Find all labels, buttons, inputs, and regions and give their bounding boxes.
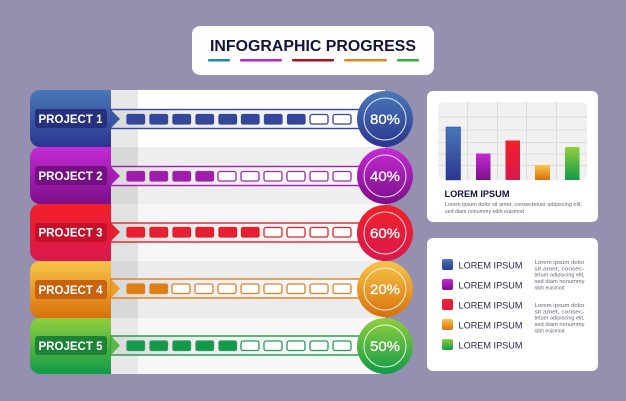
legend note 1: nibh euismod bbox=[534, 286, 565, 292]
legend note 1: sit amet, consec- bbox=[534, 266, 585, 272]
legend note 1: Lorem ipsum dolor bbox=[534, 260, 585, 266]
chart heading: LOREM IPSUM bbox=[444, 189, 510, 199]
project 1 progress segments bbox=[127, 114, 351, 124]
chart caption: sed diam nonummy nibh euismod bbox=[445, 209, 524, 215]
project 1 percent badge: 80% bbox=[370, 111, 400, 127]
legend note 2: nibh euismod bbox=[534, 328, 565, 334]
legend item 2 bbox=[442, 279, 523, 292]
project 5 label: PROJECT 5 bbox=[38, 339, 103, 353]
project 3 progress segments bbox=[127, 228, 351, 237]
panel: legend card bbox=[427, 238, 598, 371]
legend item 1 bbox=[442, 259, 523, 272]
row: project 5 bbox=[30, 318, 413, 374]
legend note 1: tetuer adipiscing elit, bbox=[534, 272, 584, 278]
legend note 1 bbox=[534, 260, 585, 292]
legend item 4 bbox=[442, 319, 523, 332]
legend item 3: LOREM IPSUM bbox=[458, 300, 523, 312]
legend item 2: LOREM IPSUM bbox=[458, 280, 523, 292]
legend note 2: sit amet, consec- bbox=[534, 310, 585, 316]
legend note 2: Lorem ipsum dolor bbox=[534, 303, 585, 309]
legend item 4: LOREM IPSUM bbox=[458, 320, 523, 332]
project 5 percent badge bbox=[357, 318, 413, 374]
project 2 percent badge: 40% bbox=[370, 168, 400, 184]
project 2 percent badge bbox=[357, 148, 413, 204]
project 4 label: PROJECT 4 bbox=[38, 283, 103, 297]
chart grid bbox=[438, 102, 587, 180]
project 4 percent badge bbox=[357, 261, 413, 317]
legend item 1: LOREM IPSUM bbox=[458, 260, 523, 272]
project 1 label: PROJECT 1 bbox=[38, 112, 103, 126]
project 2 label: PROJECT 2 bbox=[38, 169, 103, 183]
legend item 3 bbox=[442, 299, 523, 312]
project 5 percent badge: 50% bbox=[370, 338, 400, 354]
project 2 progress segments bbox=[127, 172, 351, 181]
project 4 percent badge: 20% bbox=[370, 281, 400, 297]
project 3 percent badge bbox=[357, 205, 413, 261]
project 5 progress segments bbox=[127, 341, 351, 350]
project 3 label: PROJECT 3 bbox=[38, 226, 103, 240]
row: project 2 bbox=[30, 147, 413, 204]
title card bbox=[192, 26, 434, 75]
legend item 5: LOREM IPSUM bbox=[458, 340, 523, 352]
title: INFOGRAPHIC PROGRESS bbox=[210, 38, 416, 55]
legend note 2: sed diam nonummy bbox=[534, 322, 585, 328]
chart caption: Lorem ipsum dolor sit amet, consectetuer adipiscing elit, bbox=[445, 202, 582, 208]
project 4 progress segments bbox=[127, 284, 351, 294]
row backgrounds bbox=[111, 90, 385, 374]
legend note 1: sed diam nonummy bbox=[534, 279, 585, 285]
project 3 percent badge: 60% bbox=[370, 225, 400, 241]
chart caption bbox=[445, 202, 582, 215]
legend note 2: tetuer adipiscing elit, bbox=[534, 316, 584, 322]
row: project 1 bbox=[30, 90, 413, 147]
chart bars bbox=[446, 127, 580, 180]
title colour dashes bbox=[208, 59, 419, 62]
project 1 percent badge bbox=[357, 91, 413, 147]
legend note 2 bbox=[534, 303, 585, 334]
row: project 3 bbox=[30, 204, 413, 261]
panel: bar chart card bbox=[427, 91, 598, 222]
row: project 4 bbox=[30, 261, 413, 318]
legend item 5 bbox=[442, 339, 523, 352]
